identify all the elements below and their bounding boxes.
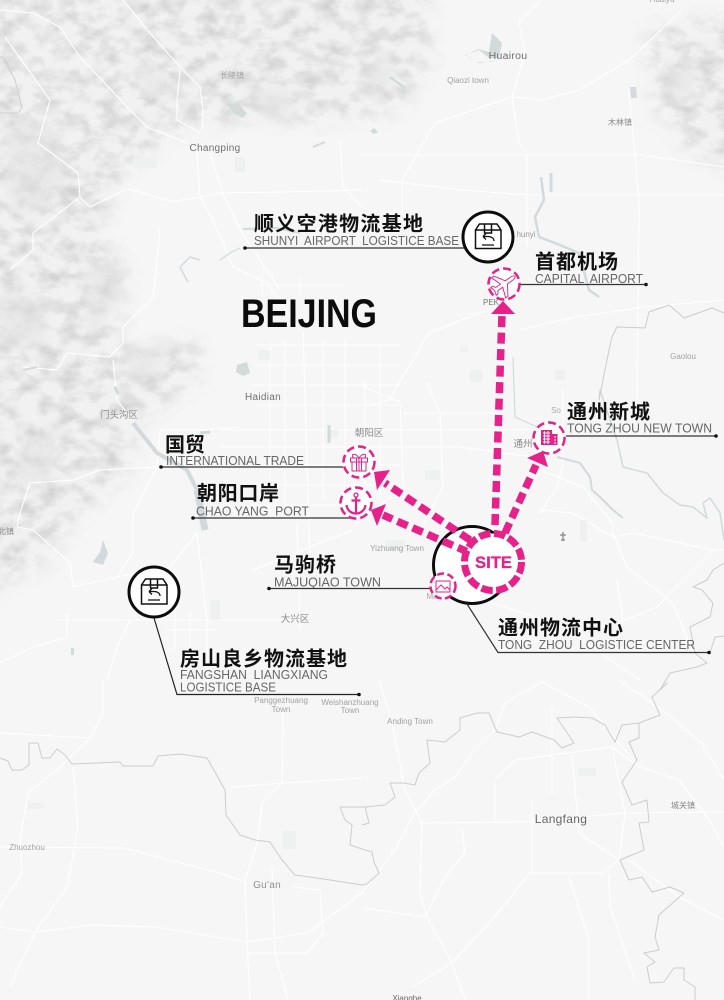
site marker <box>464 534 522 590</box>
label: Majuqiao town <box>267 554 432 590</box>
place labels: 朝阳区 <box>355 428 384 439</box>
label: capital airport: CAPITAL AIRPORT <box>535 272 643 286</box>
label: international trade: 国贸 <box>165 434 205 456</box>
arrow: site to international trade <box>374 470 470 540</box>
place labels: Zhuozhou <box>9 843 45 852</box>
place labels: hunyi <box>516 230 536 239</box>
place labels: Haidian <box>245 392 281 403</box>
place labels: 大兴区 <box>281 613 310 625</box>
place labels: Changping <box>189 143 241 154</box>
icon: Fangshan parcel <box>129 567 179 617</box>
label: Shunyi airport logistics base: 顺义空港物流基地 <box>254 212 423 236</box>
label: Tongzhou logistics center <box>467 604 711 654</box>
label: Tongzhou new town <box>566 400 718 438</box>
arrow: site to capital airport <box>491 301 515 525</box>
label: Majuqiao town: MAJUQIAO TOWN <box>274 576 381 590</box>
place labels: Ma <box>426 592 438 601</box>
label: Tongzhou new town: 通州新城 <box>567 400 650 424</box>
label: Tongzhou logistics center: TONG ZHOU LOGISTICE CENTER <box>498 638 695 652</box>
label: Chaoyang port: CHAO YANG PORT <box>196 504 309 518</box>
site marker: SITE <box>475 553 512 572</box>
label: Tongzhou new town: TONG ZHOU NEW TOWN <box>567 422 712 436</box>
place labels: Town <box>272 705 290 714</box>
place labels: 长陵镇 <box>220 70 244 80</box>
arrow: site to Chaoyang port <box>371 504 468 552</box>
title: Beijing: BEIJING <box>241 292 377 336</box>
label: Shunyi airport logistics base <box>243 212 470 250</box>
label: capital airport <box>520 250 648 286</box>
label: Fangshan Liangxiang logistics base <box>154 618 361 696</box>
place labels: PEK <box>483 298 500 307</box>
terrain shading <box>0 0 724 590</box>
place labels: 木林镇 <box>608 117 632 127</box>
icon: anchor <box>340 488 372 518</box>
place labels: Gu'an <box>253 880 281 891</box>
place labels: Langfang <box>535 812 587 826</box>
place labels: Anding Town <box>387 717 433 726</box>
label: Tongzhou logistics center: 通州物流中心 <box>498 616 623 640</box>
icon: gift <box>344 446 374 478</box>
label: Shunyi airport logistics base: SHUNYI AIRPORT LOGISTICE BASE <box>254 234 459 248</box>
label: Fangshan Liangxiang logistics base: 房山良乡物流基地 <box>180 646 347 670</box>
place labels: Huairou <box>489 50 527 62</box>
place labels: 门头沟区 <box>100 409 138 421</box>
place labels: Panggezhuang <box>254 696 308 705</box>
place labels: 通州 <box>513 439 533 450</box>
label: Chaoyang port <box>191 482 350 520</box>
place labels: Weishanzhuang <box>321 698 379 707</box>
label: international trade <box>159 434 343 469</box>
icon: picture <box>430 574 456 598</box>
place labels: Gaolou <box>670 352 696 361</box>
site highlight circle <box>434 526 510 604</box>
label: Fangshan Liangxiang logistics base: LOGISTICE BASE <box>180 680 276 694</box>
rivers and lakes <box>23 33 724 655</box>
place labels: So <box>551 406 561 415</box>
label: capital airport: 首都机场 <box>535 250 618 274</box>
place labels: 城关镇 <box>671 800 695 810</box>
place labels: Yizhuang Town <box>370 544 424 553</box>
place labels: Qiaozi town <box>447 76 489 85</box>
icon: airplane <box>486 266 522 301</box>
label: Chaoyang port: 朝阳口岸 <box>197 482 279 505</box>
label: international trade: INTERNATIONAL TRADE <box>166 454 304 468</box>
label: Majuqiao town: 马驹桥 <box>274 554 336 576</box>
label: Fangshan Liangxiang logistics base: FANGSHAN LIANGXIANG <box>180 668 328 682</box>
city grid and blocks <box>28 157 596 849</box>
place labels: Town <box>341 706 359 715</box>
icon: building <box>534 422 564 454</box>
arrow: site to Tongzhou new town <box>505 451 548 533</box>
icon: Shunyi parcel <box>463 212 513 262</box>
